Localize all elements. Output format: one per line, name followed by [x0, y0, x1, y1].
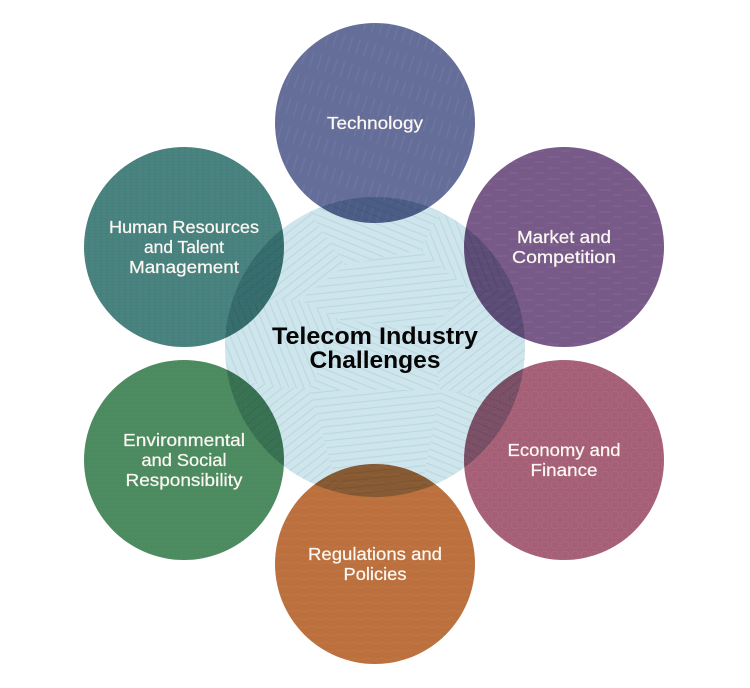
label: regulations and policies: Policies — [344, 564, 407, 584]
label: environmental and social responsibility: and Social — [142, 450, 226, 470]
panel: regulations and policies — [275, 464, 475, 664]
label: human resources and talent management: and Talent — [144, 237, 224, 257]
label: economy and finance: Finance — [530, 460, 598, 480]
label: market and competition: Competition — [512, 247, 616, 267]
panel: central circle — [225, 197, 525, 497]
label: environmental and social responsibility: Environmental — [123, 430, 245, 450]
label: regulations and policies: Regulations and — [308, 544, 442, 564]
panel: economy and finance — [464, 360, 664, 560]
label: market and competition: Market and — [517, 227, 611, 247]
title: Challenges — [310, 347, 440, 374]
panel: human resources and talent management — [84, 147, 284, 347]
label: environmental and social responsibility: Responsibility — [126, 470, 243, 490]
label: economy and finance — [508, 440, 620, 480]
title: Telecom Industry — [272, 323, 479, 350]
title — [272, 323, 479, 374]
label: human resources and talent management: Human Resources — [109, 217, 259, 237]
label: regulations and policies — [308, 544, 442, 584]
panel: technology — [275, 23, 475, 223]
panel: market and competition — [464, 147, 664, 347]
venn diagram: telecom industry challenges — [84, 23, 664, 664]
label: economy and finance: Economy and — [508, 440, 620, 460]
label: environmental and social responsibility — [123, 430, 245, 490]
panel: environmental and social responsibility — [84, 360, 284, 560]
label: market and competition — [512, 227, 616, 267]
label: human resources and talent management — [109, 217, 259, 277]
label: human resources and talent management: Management — [129, 257, 239, 277]
label: technology: Technology — [327, 113, 423, 133]
